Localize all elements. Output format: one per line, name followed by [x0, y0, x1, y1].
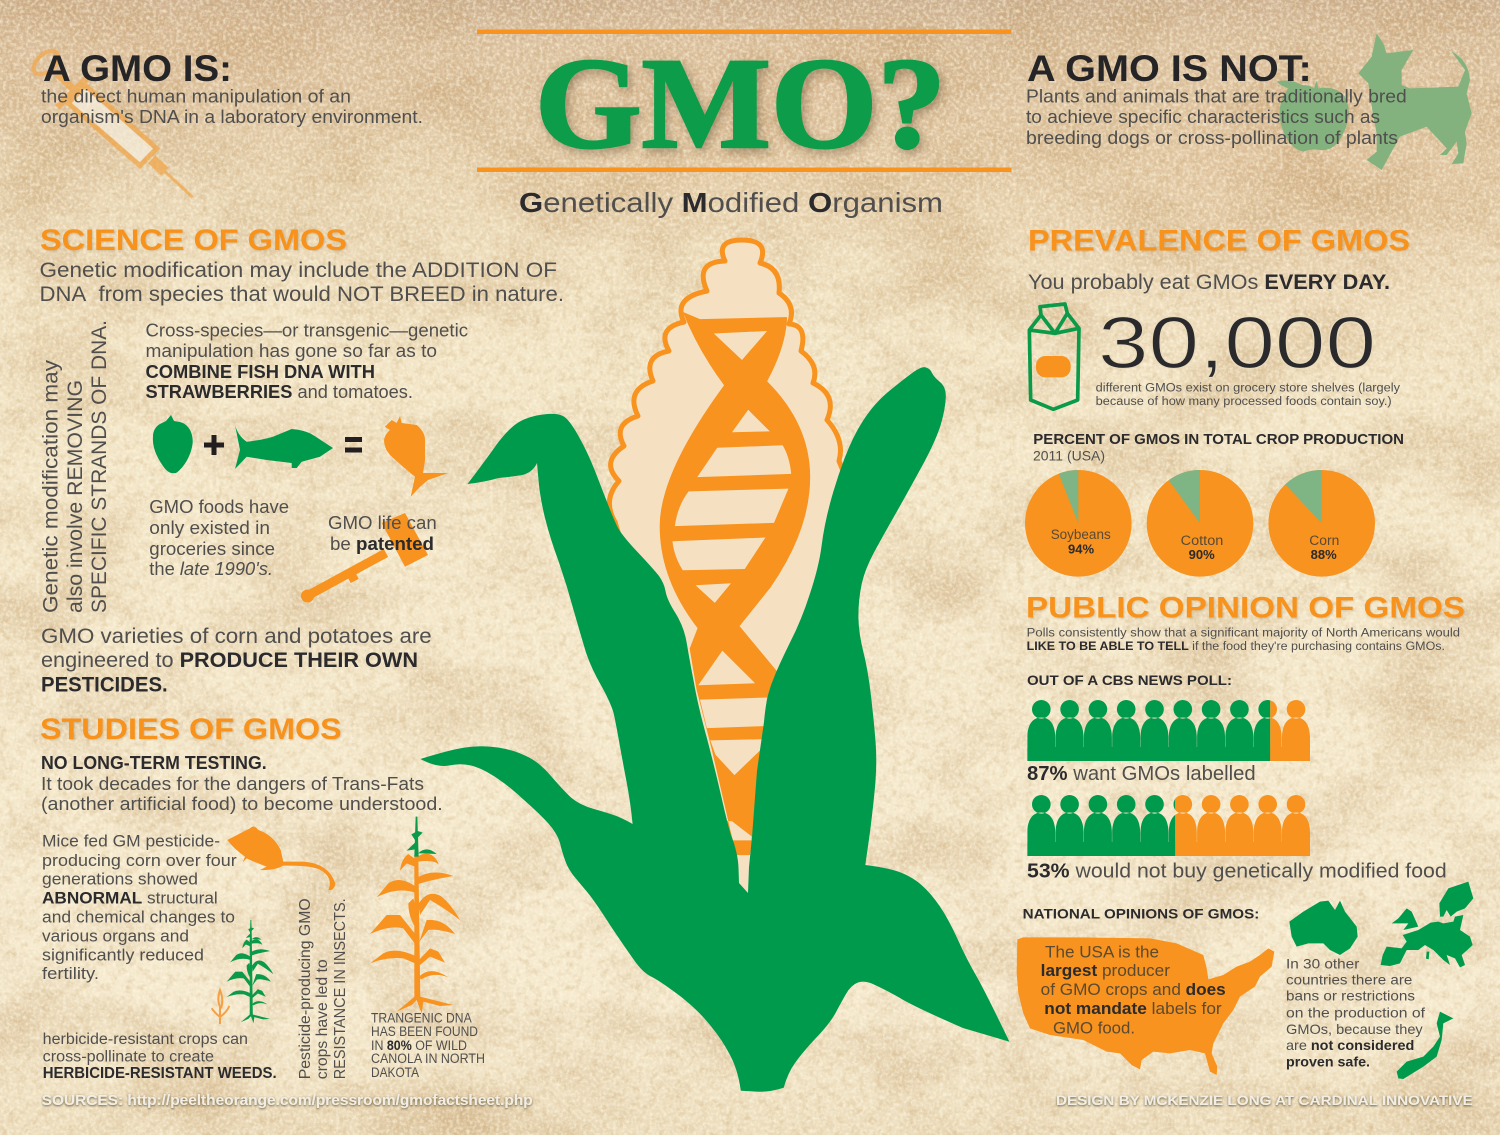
text: groceries: the late 1990's. — [149, 559, 273, 579]
icon: strawberry — [153, 415, 193, 473]
DNA helix — [660, 312, 810, 855]
text: other countries: on the production of — [1286, 1004, 1425, 1020]
intro text: DNA from species that would NOT BREED in nature. — [40, 283, 564, 306]
text: shelves note — [1096, 383, 1400, 408]
text: 87 percent: 87% want GMOs labelled — [1027, 763, 1256, 785]
map: Japan — [1397, 1012, 1453, 1079]
icon: big orange corn plant — [370, 817, 460, 1013]
text: every day: You probably eat GMOs EVERY DAY. — [1028, 271, 1390, 294]
panel: science of GMOs — [40, 224, 564, 697]
poll heading: OUT OF A CBS NEWS POLL: — [1027, 672, 1232, 688]
heading: SCIENCE OF GMOS — [40, 224, 347, 257]
icon: syringe — [29, 46, 193, 197]
vertical text: insects — [297, 898, 349, 1079]
chart subheading: 2011 (USA) — [1033, 448, 1105, 464]
icon: hybrid fish strawberry — [384, 416, 448, 497]
pie chart: soybeans: Soybeans — [1051, 527, 1111, 542]
pie chart: cotton: Cotton — [1181, 533, 1223, 548]
chart heading: PERCENT OF GMOS IN TOTAL CROP PRODUCTION — [1033, 432, 1404, 448]
big number: 30,000 — [1098, 303, 1376, 384]
icon: fish — [235, 425, 333, 469]
pie chart: corn: 88% — [1311, 547, 1337, 562]
heading: a GMO is: A GMO IS: — [43, 48, 232, 89]
icon: plus — [204, 435, 224, 455]
pictogram: 87 percent — [1027, 700, 1310, 761]
map: Europe — [1381, 882, 1473, 967]
pie chart: corn — [1268, 470, 1375, 577]
text: patented: GMO life can — [328, 513, 437, 533]
panel: prevalence of GMOs — [1025, 225, 1410, 577]
text: USA: not mandate labels for — [1044, 1000, 1222, 1018]
text: pesticides: engineered to PRODUCE THEIR OWN — [41, 649, 418, 672]
text: 53 percent: 53% would not buy genetically modified food — [1027, 860, 1447, 882]
text: polls — [1027, 628, 1460, 653]
panel: title — [477, 30, 1012, 218]
text: mice — [42, 833, 237, 983]
text: not definition: to achieve specific characteristics such as — [1026, 107, 1380, 127]
text: other countries: proven safe. — [1286, 1054, 1370, 1070]
pie chart: corn: Corn — [1309, 533, 1339, 548]
text: other countries: are not considered — [1286, 1037, 1414, 1053]
title GMO?: GMO? — [535, 32, 946, 176]
vertical text: removing DNA: also involve REMOVING — [64, 380, 87, 613]
text: not definition — [1026, 87, 1407, 148]
illustration: corn with DNA — [420, 240, 1009, 1092]
icon: equals — [345, 437, 362, 452]
text: definition: the direct human manipulation of an — [41, 86, 351, 106]
text: cross-species: Cross-species—or transgenic—genetic — [146, 320, 468, 341]
icon: milk carton — [1029, 304, 1079, 409]
intro text: Genetic modification may include the ADDITION OF — [40, 259, 557, 282]
text: cross-species: STRAWBERRIES and tomatoes. — [146, 381, 413, 402]
text: USA: The USA is the — [1045, 943, 1159, 961]
text: herbicide-resistant: HERBICIDE-RESISTANT WEEDS. — [43, 1065, 277, 1082]
text: polls: Polls consistently show that a significant majority of North Americans would — [1027, 628, 1460, 640]
pie chart: cotton: 90% — [1189, 547, 1215, 562]
text: other countries: countries there are — [1286, 972, 1413, 988]
text: mice: Mice fed GM pesticide- — [42, 833, 220, 851]
pie chart: soybeans — [1025, 470, 1132, 577]
icon: small green corn plant — [227, 920, 273, 1023]
vertical text: removing DNA — [40, 320, 111, 613]
panel: studies of GMOs — [40, 713, 485, 1082]
corn husk leaves — [420, 367, 1009, 1092]
text: mice: producing corn over four — [42, 852, 237, 870]
text: transgenic DNA: HAS BEEN FOUND — [371, 1024, 478, 1039]
vertical text: removing DNA: Genetic modification may — [40, 359, 62, 613]
footer: design credit: DESIGN BY MCKENZIE LONG AT CARDINAL INNOVATIVE — [1056, 1092, 1473, 1108]
intro text — [40, 259, 564, 306]
heading: STUDIES OF GMOS — [40, 713, 342, 746]
heading: A GMO IS NOT: — [1027, 48, 1312, 89]
text: patented — [328, 513, 437, 554]
vertical text: removing DNA: SPECIFIC STRANDS OF DNA. — [88, 320, 111, 613]
text: groceries: only existed in — [149, 518, 270, 538]
rule bottom — [477, 168, 1012, 172]
text: polls: LIKE TO BE ABLE TO TELL if the food they're purchasing contains GMOs. — [1027, 641, 1445, 653]
panel: a GMO is not — [1026, 33, 1472, 170]
text: groceries: GMO foods have — [149, 497, 289, 517]
text: transgenic DNA: IN 80% OF WILD — [371, 1038, 467, 1053]
text: shelves note: because of how many processed foods contain soy.) — [1096, 396, 1392, 408]
text: herbicide-resistant: cross-pollinate to create — [43, 1049, 214, 1066]
text: transgenic DNA — [371, 1011, 485, 1080]
rule top — [477, 30, 1012, 34]
icon: gavel — [301, 513, 428, 602]
text: groceries: groceries since — [149, 539, 275, 559]
text: other countries: In 30 other — [1286, 955, 1360, 971]
text: no long-term testing: (another artificial food) to become understood. — [41, 794, 443, 814]
icon: mouse — [227, 827, 335, 890]
text: no long-term testing: It took decades for the dangers of Trans-Fats — [41, 774, 424, 794]
map: Australia — [1289, 901, 1358, 955]
text: herbicide-resistant: herbicide-resistant crops can — [43, 1031, 248, 1048]
text: other countries: bans or restrictions — [1286, 988, 1415, 1004]
pictogram: 53 percent — [1027, 795, 1310, 856]
national opinions heading: NATIONAL OPINIONS OF GMOS: — [1023, 905, 1259, 921]
heading: PUBLIC OPINION OF GMOS — [1026, 591, 1465, 624]
text: mice: generations showed — [42, 871, 198, 889]
text: definition: organism's DNA in a laboratory environment. — [41, 107, 423, 127]
icon: dog and apple — [1277, 33, 1472, 170]
panel: a GMO is — [29, 46, 423, 197]
text: transgenic DNA: DAKOTA — [371, 1065, 419, 1080]
text: shelves note: different GMOs exist on grocery store shelves (largely — [1096, 383, 1400, 395]
text: pesticides: GMO varieties of corn and potatoes are — [41, 625, 432, 648]
text: definition — [41, 86, 423, 127]
text: not definition: Plants and animals that are traditionally bred — [1026, 87, 1407, 107]
vertical text: insects: crops have led to — [314, 959, 331, 1079]
text: USA — [1041, 943, 1226, 1037]
text: patented: be patented — [330, 534, 434, 554]
text: mice: significantly reduced — [42, 947, 204, 965]
text: mice: various organs and — [42, 928, 189, 946]
text: cross-species — [146, 320, 468, 402]
text: other countries — [1286, 955, 1425, 1070]
vertical text: insects: Pesticide-producing GMO — [297, 898, 314, 1079]
subtitle: Genetically Modified Organism — [519, 187, 943, 218]
text: herbicide-resistant — [43, 1031, 277, 1082]
pie chart: cotton — [1147, 470, 1253, 577]
text: other countries: GMOs, because they — [1286, 1021, 1423, 1037]
heading: PREVALENCE OF GMOS — [1028, 225, 1410, 258]
text: not definition: breeding dogs or cross-pollination of plants — [1026, 128, 1398, 148]
text: mice: ABNORMAL structural — [42, 890, 218, 908]
panel: public opinion of GMOs — [1017, 591, 1473, 1079]
map: USA — [1017, 937, 1274, 1075]
text: no long-term testing: NO LONG-TERM TESTING. — [41, 753, 267, 773]
text: mice: fertility. — [42, 965, 99, 983]
text: transgenic DNA: CANOLA IN NORTH — [371, 1051, 485, 1066]
text: cross-species: COMBINE FISH DNA WITH — [146, 361, 375, 382]
text: pesticides — [41, 625, 432, 697]
footer: sources: SOURCES: http://peeltheorange.com/pressroom/gmofactsheet.php — [42, 1092, 533, 1109]
text: USA: of GMO crops and does — [1041, 981, 1226, 999]
text: mice: and chemical changes to — [42, 909, 235, 927]
text: USA: GMO food. — [1053, 1019, 1135, 1037]
text: pesticides: PESTICIDES. — [41, 674, 168, 697]
text: cross-species: manipulation has gone so far as to — [146, 340, 437, 361]
text: transgenic DNA: TRANGENIC DNA — [371, 1011, 472, 1026]
text: groceries — [149, 497, 289, 579]
icon: orange weed sprout — [212, 990, 229, 1024]
text: no long-term testing — [41, 753, 443, 814]
vertical text: insects: RESISTANCE IN INSECTS. — [332, 898, 349, 1079]
text: USA: largest producer — [1041, 962, 1171, 980]
corn kernels outline — [609, 240, 846, 900]
pie chart: soybeans: 94% — [1068, 541, 1094, 556]
